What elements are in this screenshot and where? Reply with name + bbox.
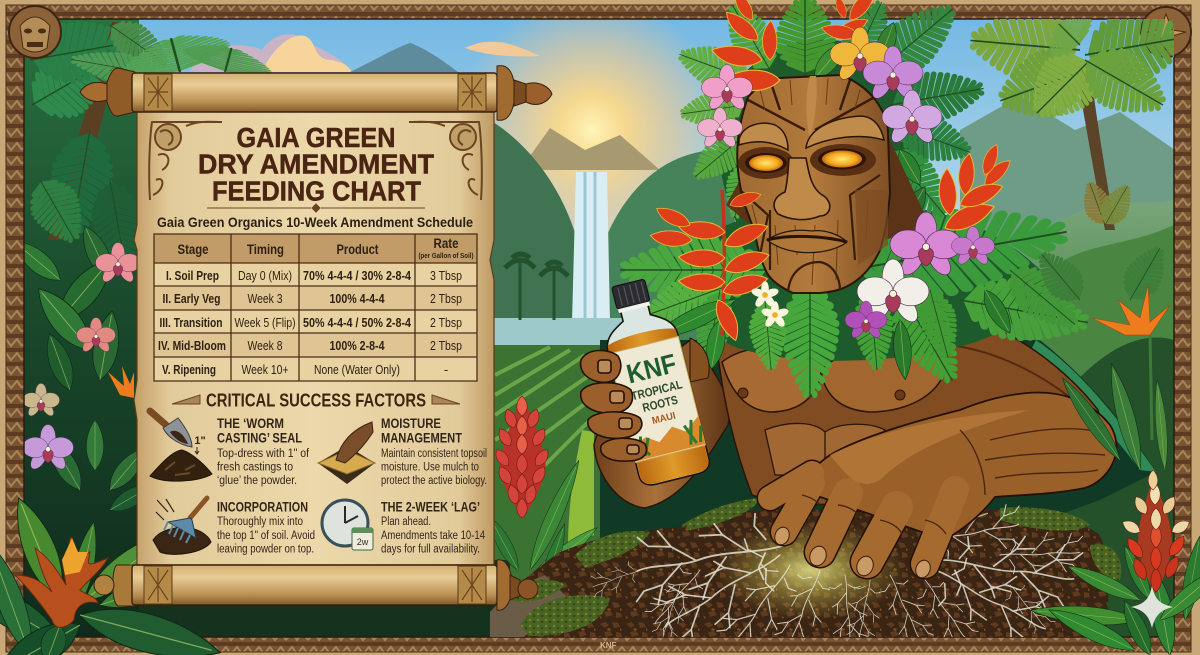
wood behind head — [885, 130, 930, 240]
left jungle — [24, 19, 139, 639]
clouds — [190, 34, 540, 72]
factor: worm casting seal: fresh castings to — [217, 462, 293, 474]
right heliconia — [941, 200, 998, 233]
far peak — [350, 43, 458, 72]
bottle cap — [612, 279, 650, 309]
row V — [162, 362, 448, 377]
row III: 2 Tbsp — [430, 315, 462, 330]
table header: Rate — [434, 236, 459, 251]
row V: Week 10+ — [242, 362, 288, 377]
bird of paradise right — [1092, 285, 1170, 335]
factor: incorporation — [217, 500, 315, 556]
torso — [715, 330, 1099, 504]
KNF bottle: KNF — [624, 348, 679, 389]
eye sockets — [738, 147, 794, 179]
wood figure — [594, 330, 1116, 580]
factor: worm casting seal: CASTING’ SEAL — [217, 430, 302, 446]
row IV — [158, 338, 462, 353]
lower plants under the scroll — [130, 560, 510, 638]
waterfall — [572, 172, 610, 322]
back of hand and forearm — [800, 392, 1116, 540]
title: FEEDING CHART — [212, 176, 421, 206]
table header: Stage — [178, 242, 209, 257]
finger fills — [770, 473, 955, 564]
terraced fields — [490, 345, 680, 635]
row III — [160, 315, 462, 330]
factor: worm casting seal: ‘glue’ the powder. — [217, 475, 297, 487]
chest pecs — [722, 345, 1085, 475]
row I: 70% 4-4-4 / 30% 2-8-4 — [303, 268, 412, 283]
right valley mountain — [605, 150, 760, 340]
corner ornament right — [409, 122, 482, 200]
watermark sparkle — [1131, 586, 1173, 628]
critical success factors heading: CRITICAL SUCCESS FACTORS — [206, 390, 426, 410]
row II: Week 3 — [248, 291, 282, 306]
soil mound with roots — [490, 498, 1122, 637]
row I — [166, 268, 462, 283]
table header: Product — [336, 242, 379, 257]
cloak strip left — [568, 430, 594, 545]
row III: III. Transition — [160, 315, 223, 330]
table header — [178, 236, 474, 260]
row II: 100% 4-4-4 — [330, 291, 385, 306]
factor: two week lag — [381, 500, 485, 556]
KNF bottle: MAUI — [651, 411, 677, 427]
lake — [490, 318, 640, 350]
row I: I. Soil Prep — [166, 268, 219, 283]
row IV: IV. Mid-Bloom — [158, 338, 226, 353]
factor: incorporation: Thoroughly mix into — [217, 516, 303, 528]
left valley mountain — [490, 120, 580, 335]
lips — [767, 230, 847, 253]
title: GAIA GREEN — [236, 122, 396, 153]
row II: II. Early Veg — [162, 291, 221, 306]
factor: incorporation: the top 1" of soil. Avoid — [217, 530, 315, 542]
glass shoulders and liquid — [599, 298, 712, 488]
factor: worm casting seal: Top-dress with 1" of — [217, 448, 310, 460]
glowing eyes — [749, 155, 783, 171]
collar shade — [660, 204, 1050, 361]
white roots — [590, 504, 1084, 637]
factor: moisture management — [381, 416, 487, 487]
row III: 50% 4-4-4 / 50% 2-8-4 — [303, 315, 412, 330]
factor: two week lag: days for full availability. — [381, 544, 480, 556]
icon: trowel and worm castings: 1" — [194, 435, 206, 447]
factor: worm casting seal — [217, 416, 310, 487]
small palms — [505, 254, 568, 320]
title: DRY AMENDMENT — [198, 148, 434, 180]
factor: two week lag: Amendments take 10-14 — [381, 530, 485, 542]
right foliage and palm — [970, 19, 1174, 470]
chin — [788, 262, 840, 292]
factor: moisture management: MOISTURE — [381, 416, 441, 431]
crown shade — [719, 39, 926, 230]
KNF bottle: ROOTS — [641, 393, 679, 415]
sun glow — [457, 0, 727, 265]
crown heliconia and orchids — [698, 0, 942, 149]
label art — [628, 416, 705, 462]
factor: moisture management: moisture. Use mulch to — [381, 462, 479, 474]
bottle hand: palm behind — [690, 338, 709, 382]
feeding schedule table — [154, 234, 477, 381]
left arm — [594, 340, 729, 508]
cloak — [568, 340, 1156, 545]
row I: Day 0 (Mix) — [238, 268, 292, 283]
icon: rake in soil — [153, 498, 211, 554]
row IV: 100% 2-8-4 — [330, 338, 385, 353]
distant mountains — [520, 128, 660, 170]
icon: clock and calendar — [322, 500, 373, 550]
ginger flower and mid leaves — [484, 396, 601, 602]
row IV: 2 Tbsp — [430, 338, 462, 353]
bottle label — [609, 336, 706, 462]
row II — [162, 291, 462, 306]
corner medallion: tiki mask — [9, 6, 61, 58]
KNF bottle: TROPICAL — [630, 377, 684, 403]
factor: moisture management: MANAGEMENT — [381, 430, 463, 446]
corner medallion: leaf — [1141, 7, 1191, 57]
sky — [24, 19, 1174, 349]
cheek lines — [740, 175, 880, 270]
row V: None (Water Only) — [314, 362, 400, 377]
title — [198, 122, 434, 206]
nose — [774, 158, 830, 220]
KNF bottle — [593, 274, 712, 488]
row II: 2 Tbsp — [430, 291, 462, 306]
tiki face — [737, 75, 890, 293]
row V: - — [444, 362, 448, 377]
factor: moisture management: Maintain consistent topsoil — [381, 448, 487, 460]
bird of paradise left — [108, 366, 134, 398]
gripping fingers — [581, 350, 646, 461]
moss patches — [510, 498, 1121, 636]
row IV: Week 8 — [248, 338, 282, 353]
right forearm and hand — [770, 392, 1116, 580]
row V: V. Ripening — [162, 362, 216, 377]
palm trunk — [48, 22, 128, 240]
factor: incorporation: leaving powder on top. — [217, 544, 314, 556]
factor: two week lag: THE 2-WEEK ‘LAG’ — [381, 500, 480, 514]
bottom right bromeliad — [1030, 470, 1200, 655]
collar foliage — [620, 193, 1093, 398]
factor: worm casting seal: THE ‘WORM — [217, 416, 284, 431]
top roller — [80, 66, 552, 120]
row I: 3 Tbsp — [430, 268, 462, 283]
crown foliage — [673, 0, 988, 240]
frame label: KNF — [600, 641, 617, 650]
corner ornament left — [149, 122, 222, 200]
icon: trowel and worm castings — [150, 411, 212, 481]
parchment scroll panel — [80, 66, 552, 610]
table header: Timing — [247, 242, 284, 257]
left foliage — [7, 11, 272, 517]
fingernails — [772, 525, 933, 580]
row III: Week 5 (Flip) — [234, 315, 296, 330]
stones — [490, 575, 570, 640]
table header: (per Gallon of Soil) — [418, 253, 474, 260]
finger outlines — [770, 473, 955, 564]
brows — [739, 123, 788, 150]
subtitle: Gaia Green Organics 10-Week Amendment Schedule — [157, 214, 473, 230]
factor: two week lag: Plan ahead. — [381, 516, 431, 528]
icon: clock and calendar: 2w — [357, 537, 369, 547]
icon: hand in mulch — [318, 422, 375, 484]
right jungle — [960, 96, 1175, 640]
bottom roller — [94, 560, 538, 610]
title divider — [207, 204, 425, 212]
bromeliad bottom left — [0, 492, 225, 655]
factor: moisture management: protect the active biology. — [381, 475, 487, 487]
finger glow — [721, 523, 899, 617]
forehead grain — [806, 76, 817, 140]
parchment sheet — [134, 105, 494, 565]
collar heliconia and orchids — [649, 143, 1015, 343]
factor: incorporation: INCORPORATION — [217, 500, 308, 514]
